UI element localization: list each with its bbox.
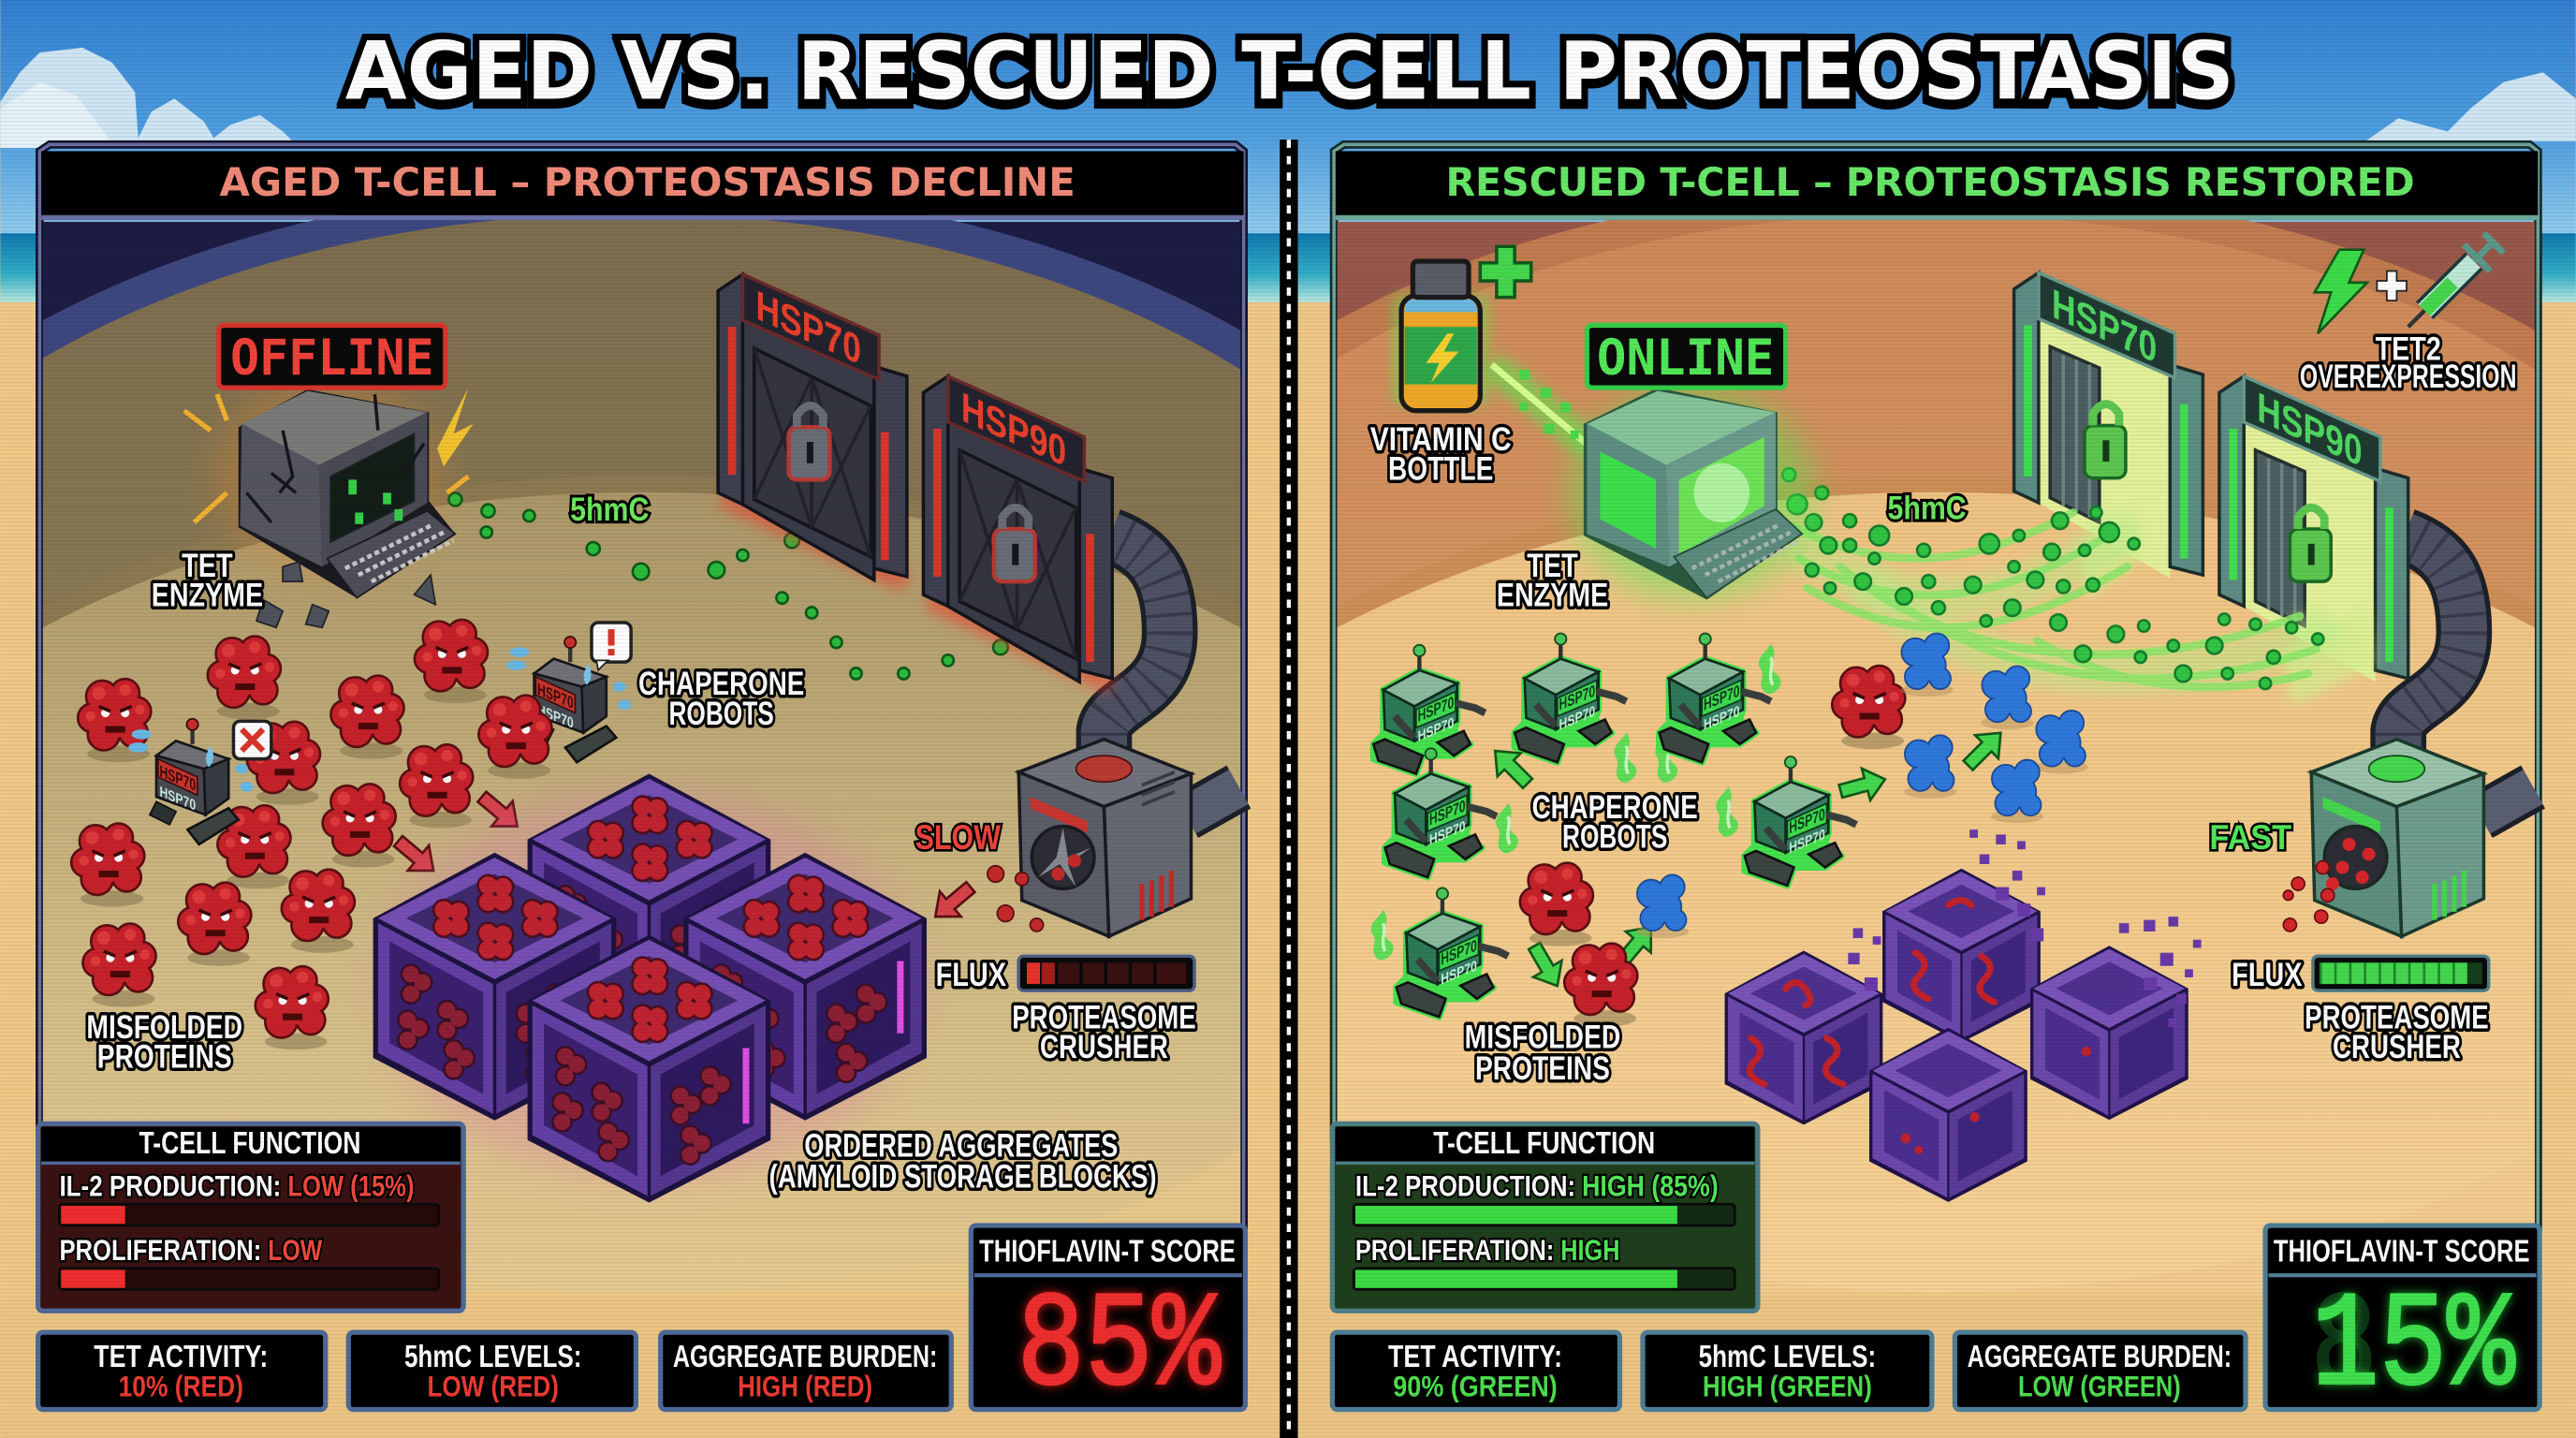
T-cell function panel, high: HIGH (85%): [1582, 1168, 1719, 1202]
flux meter, low: [936, 956, 1194, 993]
refolded and misfolded proteins: [1521, 634, 2088, 1027]
aged panel frame: [39, 144, 1244, 1232]
stat: TET activity: 10% (RED): [119, 1370, 243, 1403]
label: misfolded proteins: [86, 1009, 242, 1076]
aged scene dome and floor: [43, 184, 1240, 1293]
label: chaperone robots: CHAPERONE: [638, 666, 804, 702]
stat: aggregate burden: AGGREGATE BURDEN:: [673, 1340, 937, 1374]
rescued header: [1336, 151, 2538, 220]
chaperone robot with error: [128, 719, 271, 844]
icon: plus: [2377, 271, 2407, 301]
5hmC trail, aged: [448, 492, 1008, 680]
label: misfolded proteins: MISFOLDED: [86, 1009, 242, 1046]
stat: 5hmC levels: [348, 1332, 636, 1410]
label: proteasome crusher: PROTEASOME: [2305, 999, 2489, 1035]
vitamin C beam: [1492, 365, 1590, 447]
title: AGED VS. RESCUED T-CELL PROTEOSTASIS: [345, 24, 2234, 118]
label: TET enzyme: TET: [1527, 548, 1578, 584]
label: ordered aggregates: (AMYLOID STORAGE BLOCKS): [769, 1159, 1157, 1196]
label: TET enzyme: TET: [182, 548, 233, 584]
HSP90 gate, locked: HSP90: [961, 383, 1066, 476]
stat: aggregate burden: AGGREGATE BURDEN:: [1968, 1340, 2232, 1374]
T-cell function panel, high: PROLIFERATION:: [1355, 1233, 1554, 1267]
aged header: AGED T-CELL – PROTEOSTASIS DECLINE: [220, 159, 1076, 205]
label: proteasome crusher: [2305, 999, 2489, 1065]
OFFLINE sign: OFFLINE: [230, 330, 434, 387]
icon: lightning bolt: [2315, 250, 2367, 333]
ordered aggregates: amyloid storage blocks: [373, 773, 927, 1202]
label: vitamin C bottle: [1370, 421, 1512, 487]
stat: aggregate burden: HIGH (RED): [738, 1370, 872, 1403]
flux meter, low: FLUX: [936, 957, 1007, 993]
stat: 5hmC levels: LOW (RED): [428, 1370, 559, 1403]
label: chaperone robots: ROBOTS: [1562, 818, 1667, 855]
label: misfolded proteins: [1465, 1020, 1620, 1087]
chaperone robot with alert: [480, 623, 631, 779]
pipe, rescued crusher: [2398, 536, 2533, 816]
rescued header: RESCUED T-CELL – PROTEOSTASIS RESTORED: [1445, 159, 2415, 205]
HSP70 gate, locked: [718, 274, 907, 581]
HSP90 gate, open: [2219, 376, 2408, 682]
stat: TET activity: [38, 1332, 326, 1410]
central divider: [1280, 139, 1298, 1438]
arrows into aggregates: [388, 785, 528, 883]
vitamin C bottle: [1393, 261, 1488, 411]
Thioflavin-T score, 15%: 15%: [2311, 1271, 2515, 1424]
label: vitamin C bottle: BOTTLE: [1388, 450, 1493, 487]
label: misfolded proteins: MISFOLDED: [1465, 1020, 1620, 1056]
label: proteasome crusher: [1012, 999, 1196, 1065]
chaperone robots, active: [1371, 633, 1856, 1017]
stat: 5hmC levels: HIGH (GREEN): [1703, 1370, 1872, 1403]
SLOW label: SLOW: [915, 818, 1001, 857]
label: proteasome crusher: CRUSHER: [1040, 1029, 1168, 1065]
rescued panel frame: [1334, 144, 2538, 1232]
HSP70 gate, locked: HSP70: [755, 281, 861, 374]
label: TET2 overexpression: TET2: [2376, 330, 2441, 367]
proteasome crusher, fast: [2283, 740, 2483, 936]
label: proteasome crusher: PROTEASOME: [1012, 999, 1196, 1035]
stat: TET activity: TET ACTIVITY:: [1388, 1340, 1562, 1374]
label: misfolded proteins: PROTEINS: [97, 1039, 232, 1076]
label: TET enzyme: ENZYME: [152, 577, 263, 613]
dissolving aggregate blocks: [1725, 829, 2202, 1202]
label: TET enzyme: [152, 548, 263, 613]
label: misfolded proteins: PROTEINS: [1475, 1050, 1610, 1087]
stat: TET activity: 90% (GREEN): [1393, 1370, 1558, 1403]
label: chaperone robots: [638, 666, 804, 732]
label: 5hmC: 5hmC: [570, 492, 649, 528]
T-cell function panel, low: [38, 1123, 463, 1311]
icon: green plus: [1480, 246, 1531, 298]
label: ordered aggregates: [769, 1127, 1157, 1196]
stat: aggregate burden: [1954, 1332, 2246, 1410]
TET enzyme computer, broken: [184, 378, 474, 627]
label: vitamin C bottle: VITAMIN C: [1370, 421, 1512, 458]
5hmC particle stream: [1727, 468, 2323, 689]
stat: 5hmC levels: [1643, 1332, 1932, 1410]
TET enzyme computer, online: [1569, 386, 1815, 599]
label: TET enzyme: [1497, 548, 1608, 613]
Thioflavin-T score, 85%: 85%: [1017, 1271, 1222, 1424]
misfolded proteins, aged: [73, 621, 487, 1049]
label: TET enzyme: ENZYME: [1497, 577, 1608, 613]
label: ordered aggregates: ORDERED AGGREGATES: [804, 1127, 1118, 1164]
flux meter, high: [2232, 956, 2489, 993]
stat: TET activity: [1332, 1332, 1619, 1410]
T-cell function panel, low: T-CELL FUNCTION: [139, 1126, 360, 1161]
label: chaperone robots: ROBOTS: [668, 696, 774, 732]
Thioflavin-T score, 85%: [971, 1225, 1245, 1424]
T-cell function panel, low: IL-2 PRODUCTION:: [59, 1168, 281, 1202]
green glow flow: [1791, 512, 2374, 707]
label: proteasome crusher: CRUSHER: [2333, 1029, 2461, 1065]
T-cell function panel, low: PROLIFERATION:: [59, 1233, 261, 1267]
T-cell function panel, low: LOW: [268, 1233, 322, 1267]
label: chaperone robots: [1532, 789, 1698, 855]
panel: aged T-cell: [38, 144, 1245, 1424]
FAST label: FAST: [2209, 818, 2292, 857]
panel: rescued T-cell: [1332, 144, 2539, 1424]
T-cell function panel, high: [1332, 1123, 1758, 1311]
arrow: slow output: [925, 874, 981, 930]
stat: TET activity: TET ACTIVITY:: [94, 1340, 268, 1374]
HSP70 gate, open: HSP70: [2052, 279, 2157, 373]
workflow arrows, green: [1484, 721, 2012, 994]
HSP90 gate, open: HSP90: [2257, 383, 2363, 476]
T-cell function panel, high: T-CELL FUNCTION: [1433, 1126, 1655, 1161]
label: 5hmC: 5hmC: [1887, 490, 1967, 526]
Thioflavin-T score, 85%: THIOFLAVIN-T SCORE: [979, 1235, 1236, 1269]
ONLINE sign: ONLINE: [1597, 330, 1774, 387]
stat: aggregate burden: [661, 1332, 951, 1410]
aged header: [41, 151, 1244, 220]
T-cell function panel, low: LOW (15%): [287, 1168, 414, 1202]
proteasome crusher, slow: [988, 740, 1191, 936]
Thioflavin-T score, 15%: [2265, 1225, 2539, 1424]
T-cell function panel, high: HIGH: [1560, 1233, 1619, 1267]
HSP70 gate, open: [2014, 272, 2203, 579]
Thioflavin-T score, 15%: 8: [2310, 1271, 2378, 1424]
HSP90 gate, locked: [923, 376, 1112, 683]
stat: 5hmC levels: 5hmC LEVELS:: [1699, 1340, 1876, 1374]
stat: 5hmC levels: 5hmC LEVELS:: [404, 1340, 581, 1374]
T-cell function panel, high: IL-2 PRODUCTION:: [1355, 1168, 1575, 1202]
rescued scene dome and floor: [1338, 184, 2535, 1293]
flux meter, high: FLUX: [2232, 957, 2303, 993]
pipe, aged crusher: [1104, 536, 1238, 816]
icon: syringe: [2408, 233, 2503, 327]
label: TET2 overexpression: [2300, 330, 2517, 395]
label: chaperone robots: CHAPERONE: [1532, 789, 1698, 826]
stat: aggregate burden: LOW (GREEN): [2018, 1370, 2181, 1403]
